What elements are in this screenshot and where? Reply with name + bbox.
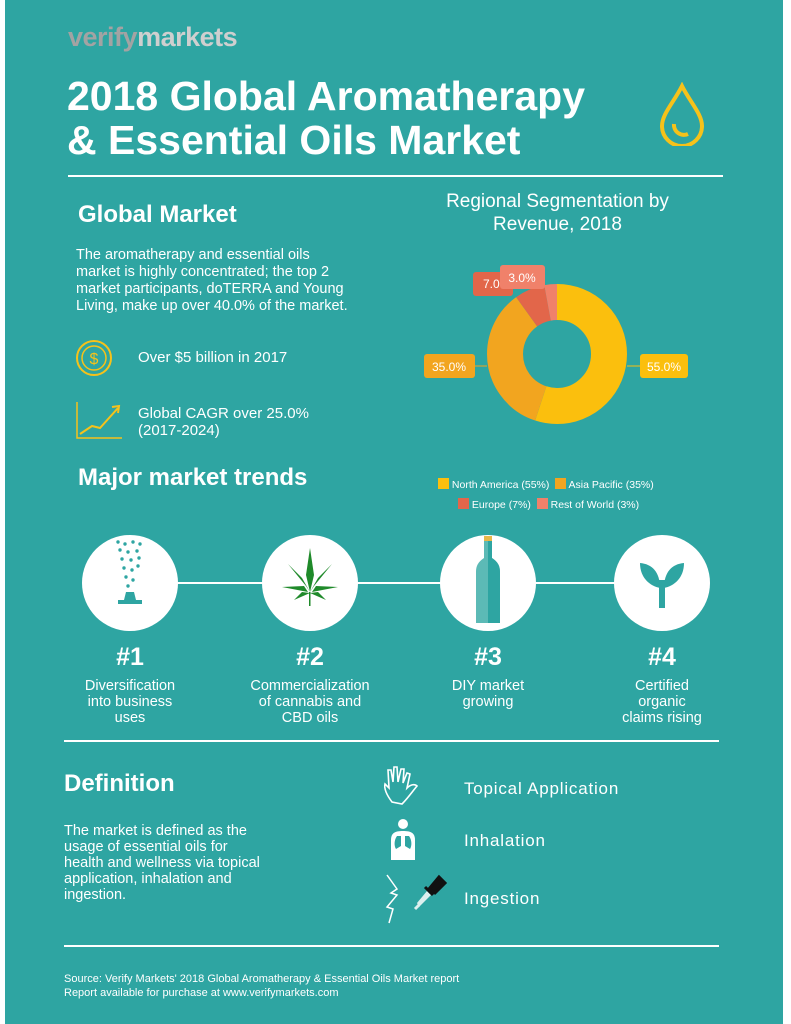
- trend 4: claims rising: [622, 710, 702, 726]
- trend 1: Diversification: [85, 678, 175, 694]
- donut chart: [424, 265, 688, 424]
- text: definition: ingestion.: [64, 887, 126, 903]
- trend 4: [622, 643, 702, 726]
- legend: North America (55%) Asia Pacific (35%): [452, 479, 654, 491]
- text: definition: application, inhalation and: [64, 871, 232, 887]
- donut chart: 55.0%: [647, 360, 681, 374]
- icon: hand: [384, 766, 418, 805]
- text: definition: usage of essential oils for: [64, 839, 228, 855]
- title: [67, 73, 585, 163]
- title: & Essential Oils Market: [67, 117, 520, 163]
- icon: growth chart: [76, 402, 122, 439]
- icon: bottle: [440, 535, 536, 631]
- text: definition: The market is defined as the: [64, 823, 247, 839]
- logo: verifymarkets: [68, 22, 237, 52]
- icon: oil drop: [660, 82, 704, 146]
- source footer: Source: Verify Markets' 2018 Global Aromatherapy & Essential Oils Market report: [64, 973, 459, 985]
- source footer: Report available for purchase at www.verifymarkets.com: [64, 987, 338, 999]
- stat: revenue: [76, 340, 287, 376]
- icon: mouth and dropper: [386, 874, 447, 924]
- label: inhalation: Inhalation: [464, 831, 546, 850]
- legend: [438, 478, 654, 511]
- heading: definition: Definition: [64, 770, 175, 797]
- text: global market description: market participants, doTERRA and Young: [76, 281, 344, 297]
- stat: CAGR: Global CAGR over 25.0%: [138, 405, 309, 422]
- trend 2: of cannabis and: [259, 694, 361, 710]
- trend 3: growing: [463, 694, 513, 710]
- trend 1: #1: [116, 643, 144, 671]
- trend 2: Commercialization: [250, 678, 370, 694]
- icon: lungs person: [391, 819, 415, 860]
- stat: CAGR: [76, 402, 309, 439]
- trend 2: [250, 643, 370, 726]
- label: ingestion: Ingestion: [464, 889, 540, 908]
- donut chart: 7.0: [483, 277, 500, 291]
- icon: diffuser: [82, 535, 178, 631]
- label: topical: Topical Application: [464, 779, 619, 798]
- icon: dollar coin: [76, 340, 112, 376]
- trend 1: [85, 643, 175, 726]
- trend 3: [452, 643, 524, 710]
- stat: revenue: Over $5 billion in 2017: [138, 349, 287, 366]
- heading: global market: Global Market: [78, 201, 237, 228]
- text: global market description: The aromatherapy and essential oils: [76, 247, 310, 263]
- icon: dollar coin: $: [90, 351, 99, 368]
- trend 4: #4: [648, 643, 676, 671]
- text: definition: [64, 823, 260, 903]
- legend: Europe (7%) Rest of World (3%): [472, 499, 639, 511]
- trend 3: #3: [474, 643, 502, 671]
- stat: CAGR: (2017-2024): [138, 422, 220, 439]
- icon: sprout: [614, 535, 710, 631]
- donut chart: 35.0%: [432, 360, 466, 374]
- trend 1: uses: [115, 710, 145, 726]
- trend 4: Certified: [635, 678, 689, 694]
- trend labels: [85, 643, 702, 726]
- icon: cannabis leaf: [262, 535, 358, 631]
- source footer: [64, 973, 460, 999]
- trend 2: CBD oils: [282, 710, 338, 726]
- heading: major market trends: Major market trends: [78, 464, 307, 491]
- title: 2018 Global Aromatherapy: [67, 73, 585, 119]
- heading: regional segmentation: Regional Segmentation by Revenue, 2018: [446, 191, 669, 235]
- text: global market description: market is highly concentrated; the top 2: [76, 264, 329, 280]
- trends timeline: [82, 535, 710, 631]
- trend 1: into business: [88, 694, 172, 710]
- trend 4: organic: [638, 694, 686, 710]
- donut chart: 3.0%: [508, 271, 536, 285]
- text: global market description: Living, make up over 40.0% of the market.: [76, 298, 348, 314]
- text: definition: health and wellness via topical: [64, 855, 260, 871]
- trend 3: DIY market: [452, 678, 524, 694]
- trend 2: #2: [296, 643, 324, 671]
- text: global market description: [76, 247, 348, 314]
